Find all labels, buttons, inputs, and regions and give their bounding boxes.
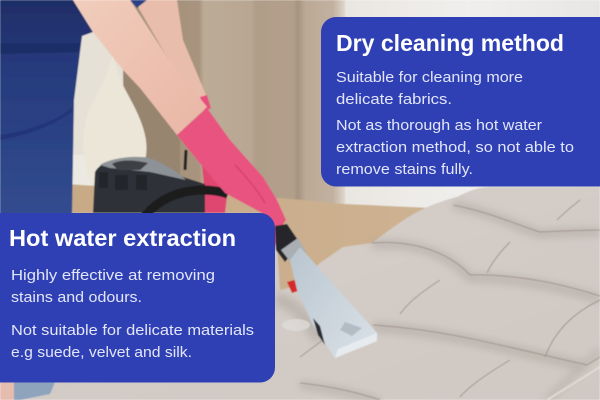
dress: [0, 0, 93, 215]
sofa shading: [275, 205, 600, 400]
dress sleeve: [130, 0, 147, 8]
text: effectiveness: [11, 267, 215, 306]
jeans below panel: [14, 382, 55, 400]
back arm: [138, 0, 206, 100]
cleaning nozzle: [290, 247, 377, 358]
text: limitations: Not as thorough as hot water: [336, 117, 542, 134]
wall skirting: [67, 155, 93, 187]
back glove: [195, 165, 228, 213]
text: suitability: [336, 69, 523, 108]
text: effectiveness: stains and odours.: [11, 289, 142, 306]
text: effectiveness: Highly effective at removing: [11, 267, 215, 284]
text: suitability: delicate fabrics.: [336, 91, 452, 108]
heading: dry cleaning method: Dry cleaning method: [336, 30, 564, 56]
beige curtain: [110, 0, 345, 204]
text: limitations: [336, 117, 574, 178]
text: suitability: Suitable for cleaning more: [336, 69, 523, 86]
damp patch: [282, 319, 310, 331]
text: unsuitable materials: Not suitable for delicate materials: [11, 322, 254, 339]
text: unsuitable materials: e.g suede, velvet and silk.: [11, 344, 192, 361]
panel: dry cleaning method: [321, 17, 600, 186]
red clip: [287, 279, 301, 293]
curtain behind vase: [123, 60, 180, 190]
panel: hot water extraction: [0, 213, 275, 382]
front arm: [73, 0, 207, 135]
sofa: [0, 187, 600, 400]
vase: [83, 53, 146, 190]
heading: hot water extraction: Hot water extraction: [9, 225, 236, 251]
front glove: [177, 108, 286, 250]
text: limitations: remove stains fully.: [336, 161, 473, 178]
text: limitations: extraction method, so not able to: [336, 139, 574, 156]
hose: [145, 190, 228, 216]
hose cord: [185, 150, 186, 170]
tube: [275, 224, 300, 262]
floor: [67, 184, 432, 290]
text: unsuitable materials: [11, 322, 254, 361]
back glove cuff: [200, 95, 211, 112]
skin below panel: [0, 382, 14, 400]
wall: [67, 0, 125, 190]
sofa seams: [300, 200, 600, 400]
vacuum body: [93, 158, 205, 213]
sheer curtain: [335, 0, 600, 216]
